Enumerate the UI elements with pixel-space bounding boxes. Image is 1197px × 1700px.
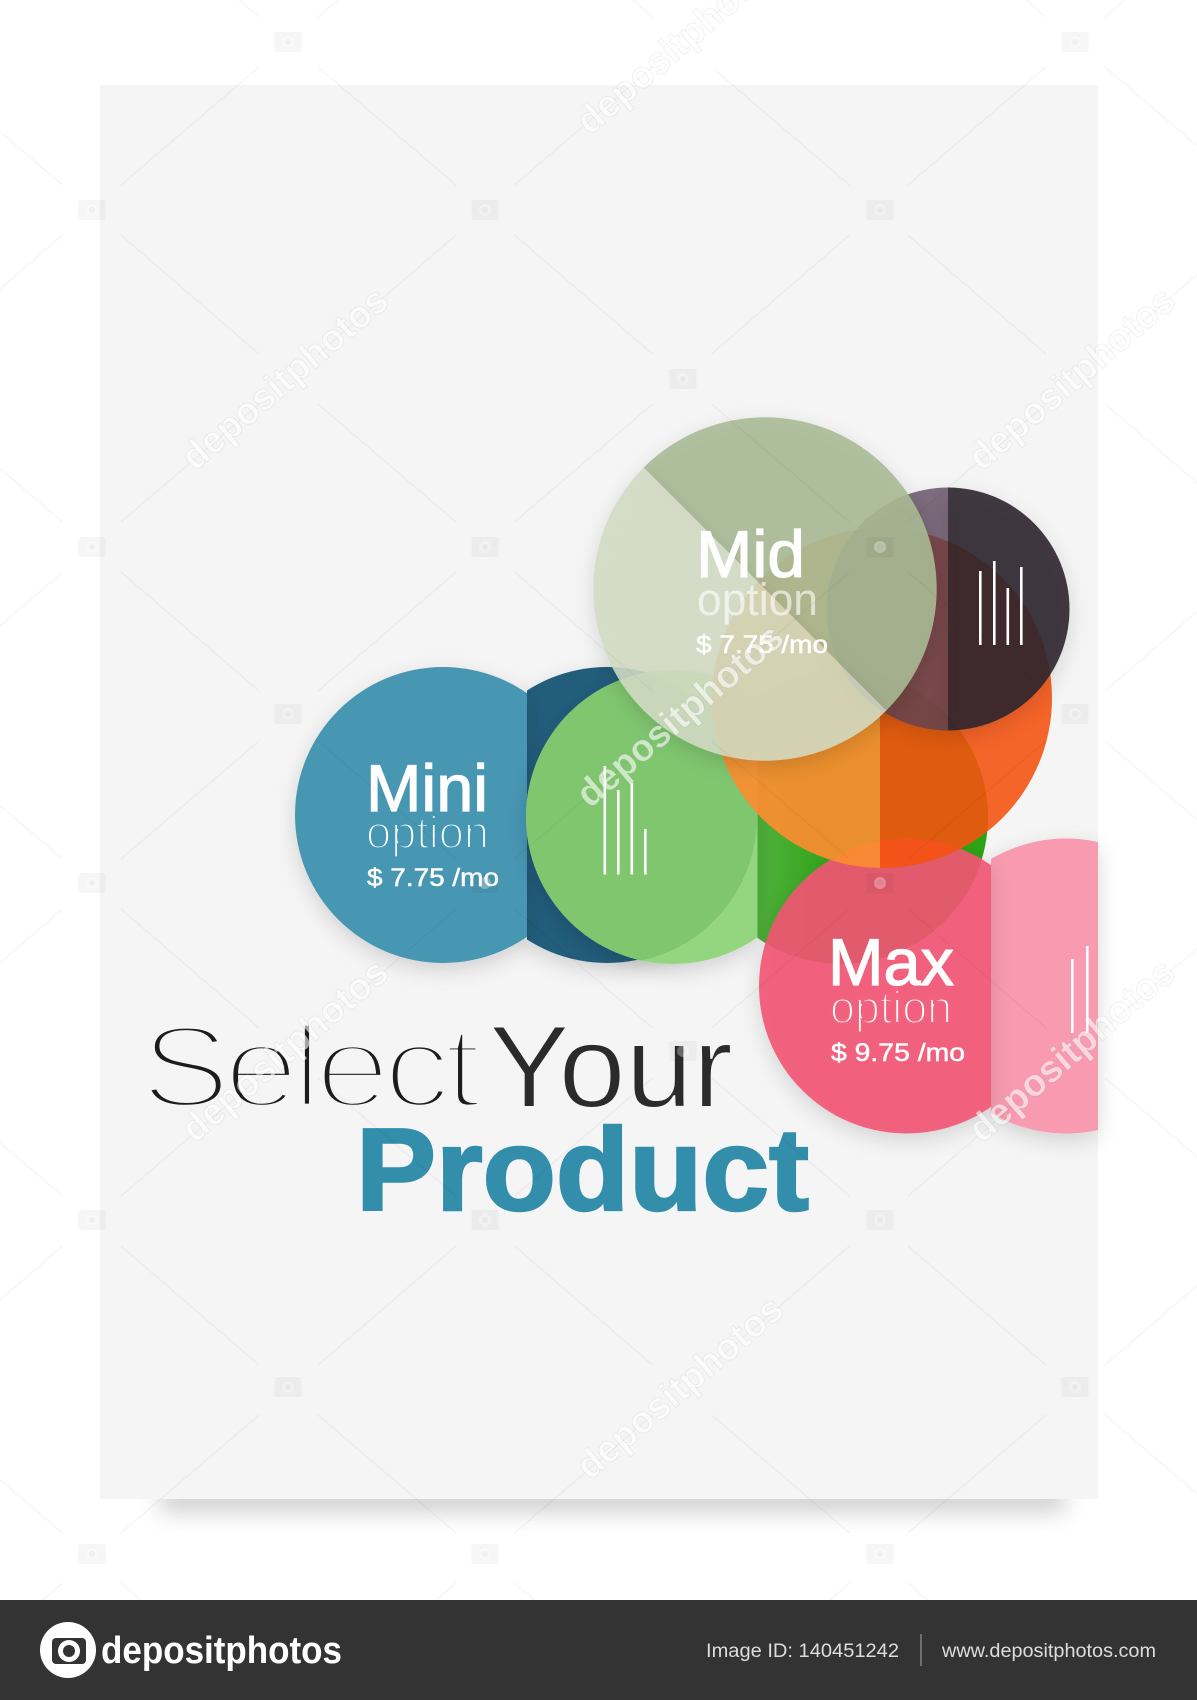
dark bar icon <box>979 561 1023 645</box>
circle group: green chart <box>463 670 988 964</box>
max front circle <box>752 838 998 1147</box>
max right half <box>984 838 1106 1148</box>
mid lower-left segment <box>587 468 886 774</box>
icon: camera logo <box>40 1622 96 1678</box>
page shadow <box>160 1486 1065 1512</box>
watermark text: depositphotos <box>569 616 792 816</box>
label: mid option <box>696 517 828 659</box>
watermark text <box>174 0 1184 1488</box>
max heading: Max <box>828 925 954 999</box>
image id: Image ID: 140451242 <box>706 1641 899 1662</box>
mid price: $ 7.75 /mo <box>696 631 828 659</box>
mid subtitle: option <box>697 574 818 625</box>
mini back half <box>522 667 667 977</box>
max subtitle: option <box>830 982 952 1033</box>
footer bar <box>0 1600 1197 1700</box>
pink bar icon <box>1071 946 1089 1033</box>
mini front circle <box>288 667 531 977</box>
green light circle <box>522 670 762 978</box>
green front overlap <box>526 680 757 960</box>
mid heading: Mid <box>696 517 805 591</box>
watermark text: depositphotos <box>174 951 397 1151</box>
watermark text: depositphotos <box>961 951 1184 1151</box>
orange left half <box>712 530 880 868</box>
dark right half <box>946 488 1076 742</box>
watermark camera icons <box>78 32 1088 1564</box>
mini heading: Mini <box>366 751 488 825</box>
dark left strip <box>826 488 949 740</box>
watermark text: depositphotos <box>174 279 397 479</box>
website: www.depositphotos.com <box>941 1641 1156 1662</box>
mid upper-right segment <box>644 417 937 715</box>
title word: Select: Select <box>140 1001 481 1132</box>
title <box>140 1001 809 1235</box>
label: mini option <box>366 751 499 892</box>
circle group: orange <box>712 528 1052 868</box>
watermark text: depositphotos <box>569 1288 792 1488</box>
title word: Product: Product <box>356 1104 809 1235</box>
flyer sheet <box>100 85 1098 1499</box>
title word: Your: Your <box>489 1001 733 1132</box>
circle group: max option <box>752 838 1106 1148</box>
circle group: mini option <box>288 667 667 977</box>
circle group: mid option <box>593 417 937 761</box>
label: max option <box>828 925 965 1067</box>
logo wordmark: depositphotos <box>101 1630 342 1672</box>
green back half <box>758 712 988 964</box>
circle group: dark chart <box>826 488 1070 730</box>
mini subtitle: option <box>366 807 489 858</box>
green bar icon <box>604 766 647 874</box>
mini price: $ 7.75 /mo <box>367 864 499 892</box>
max price: $ 9.75 /mo <box>831 1039 965 1067</box>
orange right half <box>880 534 1052 868</box>
watermark text: depositphotos <box>961 279 1184 479</box>
